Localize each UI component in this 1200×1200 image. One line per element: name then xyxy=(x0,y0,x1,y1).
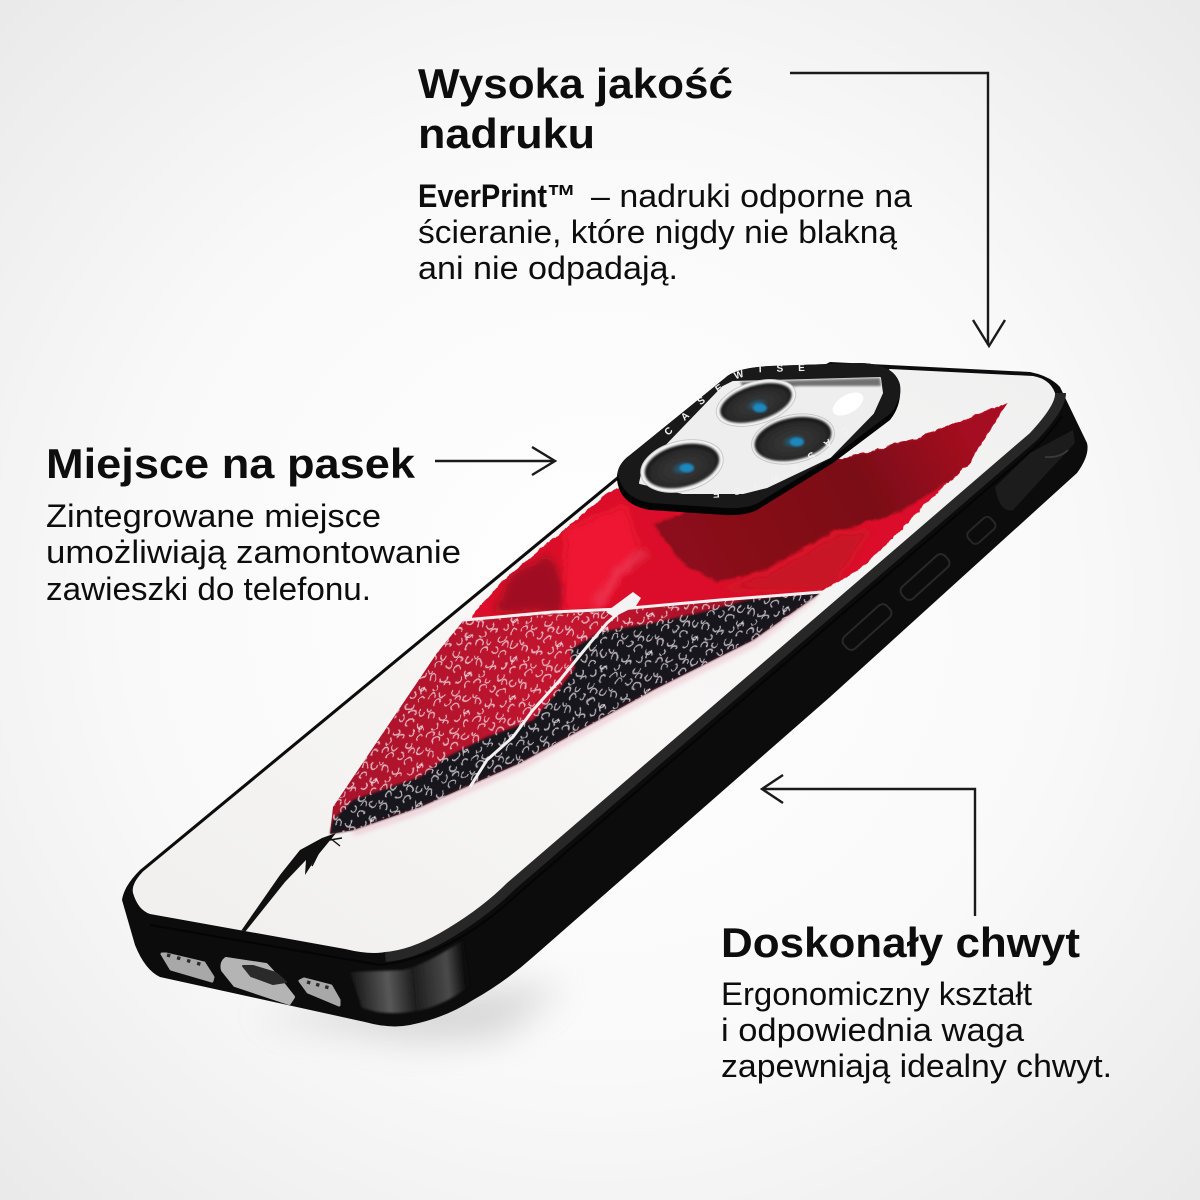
body: i odpowiednia waga xyxy=(721,1012,1024,1048)
bump ring surface xyxy=(618,356,901,508)
grip highlight xyxy=(1045,450,1068,457)
white crack lines xyxy=(464,592,822,787)
bump text lower: CASEWISE xyxy=(714,438,830,498)
body: ścieranie, które nigdy nie blakną xyxy=(418,214,897,250)
black paint band xyxy=(330,593,820,834)
body: umożliwiają zamontowanie xyxy=(46,534,461,570)
heading xyxy=(418,60,733,157)
body: EverPrint™ xyxy=(418,178,576,214)
side rim band xyxy=(385,393,1056,952)
bright centre xyxy=(565,505,640,612)
lens top xyxy=(711,371,801,435)
pale streak xyxy=(595,552,645,607)
bump text upper: CASEWISE xyxy=(664,364,804,434)
charging port xyxy=(222,959,293,1003)
artwork xyxy=(241,390,1020,932)
side button: volume down xyxy=(840,602,894,652)
mid red lower sweep xyxy=(720,530,870,590)
text block: print quality xyxy=(418,60,912,286)
dark brush wedge xyxy=(653,403,1007,582)
side button: mute xyxy=(965,515,998,546)
crack burst xyxy=(606,592,641,617)
bright red base xyxy=(472,403,1008,618)
side groove line xyxy=(150,416,1062,965)
side button: volume up xyxy=(898,552,952,602)
camera window xyxy=(640,378,882,493)
text block: grip xyxy=(721,919,1112,1084)
case body xyxy=(122,362,1088,1026)
black brush tail xyxy=(241,833,342,932)
phone shadow xyxy=(250,985,565,1042)
window inner shade xyxy=(740,378,881,390)
upper paint stroke xyxy=(472,403,1008,618)
back face xyxy=(133,369,1055,953)
speaker right xyxy=(300,979,339,1005)
body: zapewniają idealny chwyt. xyxy=(721,1048,1112,1084)
body: Zintegrowane miejsce xyxy=(46,498,381,534)
arrow: grip xyxy=(762,775,975,916)
heading: nadruku xyxy=(418,110,595,157)
bubble texture xyxy=(330,593,820,834)
phone in case xyxy=(122,362,1088,1026)
body: – nadruki odporne na xyxy=(591,178,912,214)
lens right xyxy=(747,407,839,471)
heading: Wysoka jakość xyxy=(418,60,733,107)
left dark blotch xyxy=(495,555,565,612)
lower scratch texture block xyxy=(330,593,820,834)
body: Ergonomiczny kształt xyxy=(721,976,1032,1012)
body xyxy=(418,178,912,286)
corner gloss xyxy=(350,940,470,1013)
pink paint halo xyxy=(353,596,815,833)
speaker left xyxy=(162,954,213,981)
body xyxy=(46,498,461,607)
body: ani nie odpadają. xyxy=(418,250,678,286)
flash xyxy=(829,388,867,420)
text block: strap slot xyxy=(46,440,461,607)
heading: Miejsce na pasek xyxy=(46,440,416,487)
side grip panel xyxy=(995,430,1075,511)
arrow: strap slot xyxy=(435,447,555,475)
lens left xyxy=(635,432,729,500)
camera bump xyxy=(617,363,900,515)
body xyxy=(721,976,1112,1084)
body: zawieszki do telefonu. xyxy=(46,571,371,607)
arrow: print quality xyxy=(790,73,1005,346)
heading: Doskonały chwyt xyxy=(721,919,1080,966)
